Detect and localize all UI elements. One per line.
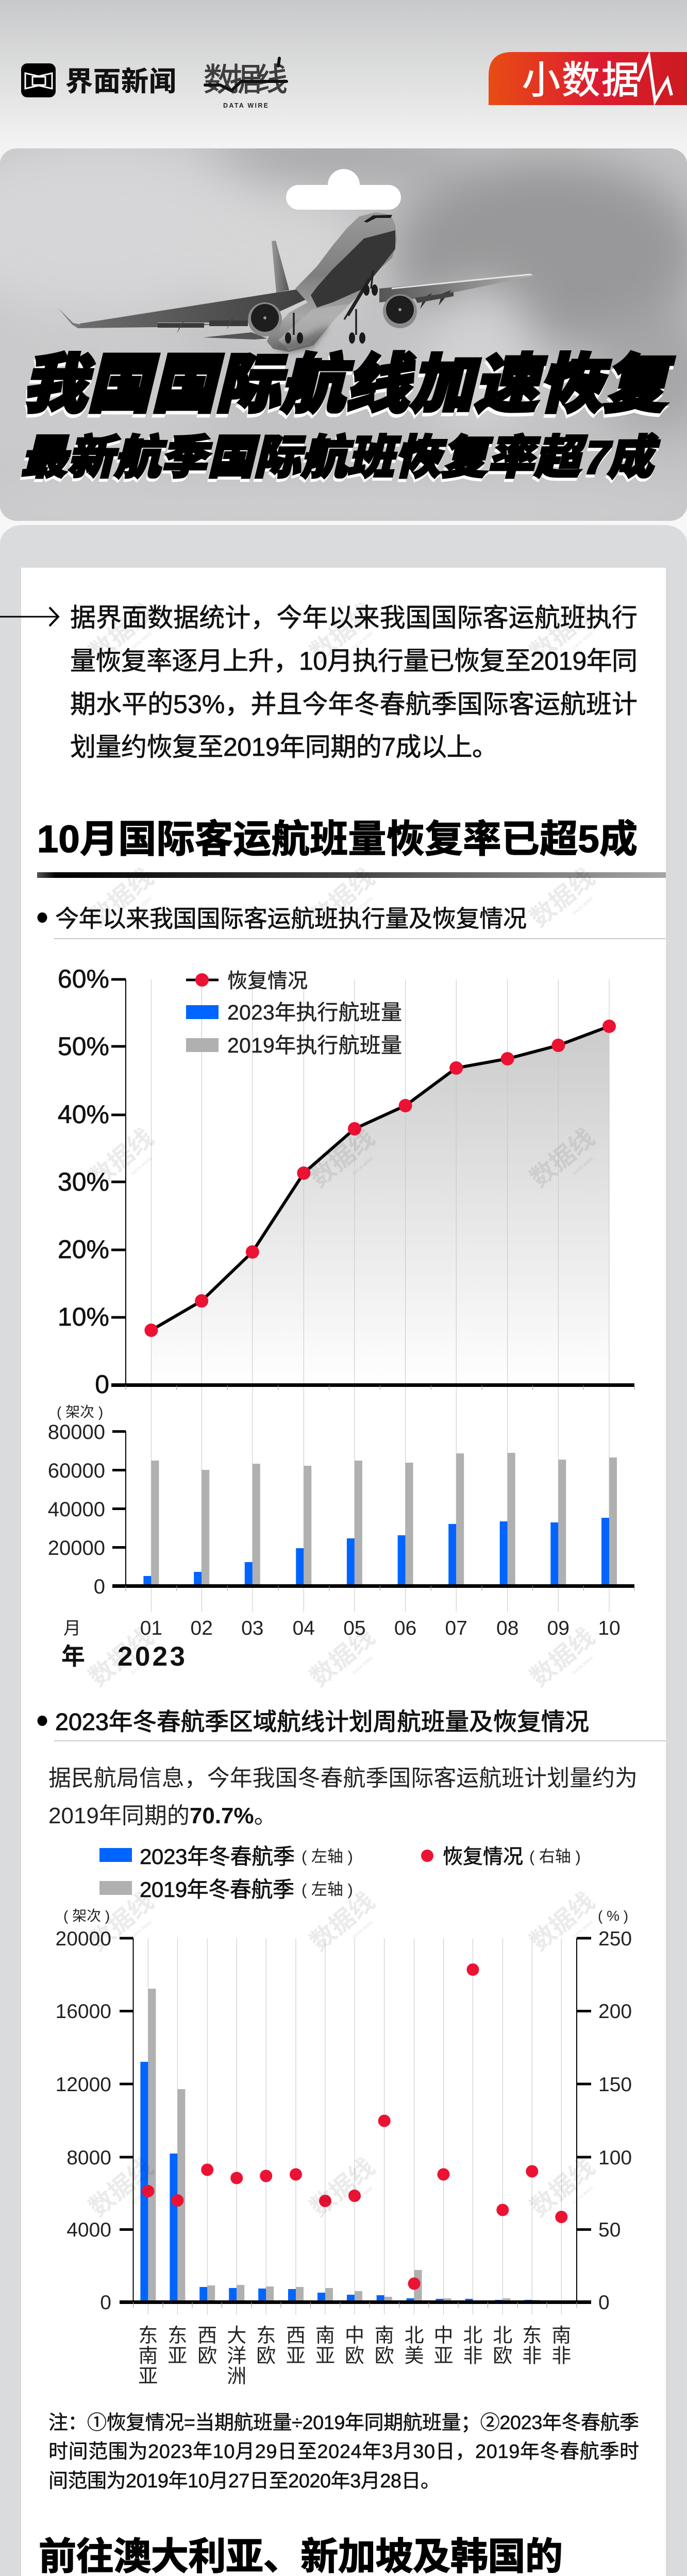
y axis: recovery: 0 — [95, 1370, 109, 1399]
y axis: flights: 80000 — [48, 1421, 105, 1444]
note: regional: 间范围为2019年10月27日至2020年3月28日。 — [48, 2470, 440, 2492]
x labels: regions: 中 — [433, 2325, 454, 2347]
badge: small data: 小数据 — [522, 59, 640, 101]
x labels: regions: 欧 — [345, 2346, 364, 2367]
aircraft — [58, 212, 537, 352]
watermarks: DATA WIRE — [572, 1156, 594, 1176]
left axis: ( 架次 ) — [63, 1908, 110, 1924]
watermarks: DATA WIRE — [351, 1655, 374, 1675]
x labels: regions: 北 — [405, 2325, 424, 2347]
watermarks: 数据线 — [526, 2154, 600, 2222]
landing gear — [285, 270, 378, 344]
legend: monthly: 2023年执行航班量 — [227, 1001, 402, 1024]
y axis: recovery: 40% — [58, 1100, 109, 1129]
x axis year: 2023 — [118, 1641, 185, 1672]
x labels: regions: 亚 — [315, 2346, 335, 2367]
x axis months: 10 — [598, 1617, 621, 1639]
line series — [144, 1020, 616, 1337]
right axis: 100 — [598, 2147, 632, 2169]
left axis: 12000 — [56, 2074, 111, 2096]
x labels: regions: 洋 — [227, 2346, 246, 2367]
x axis months: 02 — [191, 1617, 213, 1639]
x labels: regions: 东 — [256, 2325, 276, 2347]
watermarks: DATA WIRE — [351, 1919, 374, 1940]
y axis: recovery: 10% — [58, 1302, 109, 1331]
x labels: regions: 亚 — [286, 2346, 306, 2367]
watermarks: DATA WIRE — [351, 2185, 374, 2206]
chart: monthly recovery line and bars — [48, 964, 634, 1672]
x axis months: 01 — [140, 1617, 162, 1639]
x labels: regions: 西 — [286, 2325, 306, 2347]
legend: regional: ( 左轴 ) — [301, 1848, 353, 1866]
x axis months: 05 — [343, 1617, 366, 1639]
left axis: 8000 — [66, 2147, 111, 2169]
right axis: 0 — [598, 2292, 610, 2314]
x axis year: 年 — [61, 1643, 85, 1670]
x axis months: 月 — [63, 1619, 81, 1638]
watermarks: 数据线 — [526, 864, 600, 933]
x labels: regions: 非 — [551, 2346, 571, 2367]
y axis: recovery: 60% — [58, 964, 109, 993]
x axis months: 07 — [445, 1617, 467, 1639]
y axis: flights: 60000 — [48, 1460, 105, 1482]
badge: small data — [489, 52, 687, 105]
page background top — [0, 0, 687, 541]
note: regional: 注：①恢复情况=当期航班量÷2019年同期航班量；②2023年冬春航季 — [48, 2412, 639, 2434]
x labels: regions: 亚 — [167, 2346, 187, 2367]
hero title: 我国国际航线加速恢复 — [19, 352, 680, 424]
watermarks: DATA WIRE — [572, 630, 594, 651]
x labels: regions: 欧 — [493, 2346, 512, 2367]
intro text: 划量约恢复至2019年同期的7成以上。 — [70, 733, 498, 761]
left axis: 16000 — [56, 2001, 111, 2023]
paragraph: regional: 2019年同期的70.7%。 — [48, 1803, 277, 1828]
x axis months: 06 — [394, 1617, 416, 1639]
watermarks: DATA WIRE — [130, 2185, 153, 2206]
watermarks: 数据线 — [306, 1888, 380, 1956]
watermarks: 数据线 — [85, 1623, 159, 1692]
watermarks: DATA WIRE — [130, 1156, 153, 1176]
note: regional — [48, 2412, 639, 2492]
white content panel — [21, 568, 666, 2576]
legend: regional: 2023年冬春航季 — [140, 1844, 295, 1869]
intro text: 据界面数据统计，今年以来我国国际客运航班执行 — [70, 603, 638, 632]
watermarks: DATA WIRE — [351, 630, 374, 651]
watermarks: 数据线 — [306, 1623, 380, 1692]
x labels: regions: 非 — [463, 2346, 483, 2367]
hero title: 最新航季国际航班恢复率超7成 — [18, 432, 663, 484]
legend: monthly: 恢复情况 — [227, 970, 308, 992]
paragraph: regional — [48, 1766, 638, 1828]
watermarks: DATA WIRE — [572, 2185, 594, 2206]
y axis: recovery: 50% — [58, 1032, 109, 1061]
legend: regional: ( 左轴 ) — [301, 1880, 353, 1899]
rule — [37, 872, 666, 878]
hero image panel — [0, 134, 687, 538]
x labels: regions: 亚 — [138, 2366, 158, 2387]
watermarks: 数据线 — [306, 864, 380, 933]
watermarks: DATA WIRE — [572, 895, 594, 916]
subheading: regional plan: 2023年冬春航季区域航线计划周航班量及恢复情况 — [55, 1708, 589, 1735]
x labels: regions: 非 — [522, 2346, 542, 2367]
hero title — [17, 349, 681, 487]
watermarks: DATA WIRE — [351, 1156, 374, 1176]
intro text: 期水平的53%，并且今年冬春航季国际客运航班计 — [70, 690, 638, 719]
watermarks: DATA WIRE — [130, 1919, 153, 1940]
x axis months: 08 — [496, 1617, 518, 1639]
gray page body — [0, 525, 687, 2576]
x labels: regions: 东 — [167, 2325, 187, 2347]
logo: jiemian news — [21, 63, 176, 97]
right axis — [577, 1908, 632, 2314]
watermarks: 数据线 — [526, 1888, 600, 1956]
watermarks: 数据线 — [85, 2154, 159, 2222]
watermarks: 数据线 — [526, 599, 600, 667]
x labels: regions: 中 — [345, 2325, 364, 2347]
y axis: flights: 40000 — [48, 1498, 105, 1521]
icon: white knob — [286, 169, 401, 210]
engines — [248, 294, 417, 336]
x labels: regions: 东 — [138, 2325, 158, 2347]
x labels: regions: 洲 — [227, 2366, 246, 2387]
legend: monthly — [186, 970, 402, 1057]
x labels: regions: 南 — [138, 2346, 158, 2367]
x axis months: 04 — [293, 1617, 315, 1639]
x labels: regions — [138, 2325, 571, 2387]
x labels: regions: 北 — [493, 2325, 512, 2347]
dots: regional recovery — [142, 1963, 567, 2290]
bars: 2019 season — [148, 1989, 540, 2302]
watermarks: DATA WIRE — [130, 1655, 153, 1675]
right axis: 150 — [598, 2074, 632, 2096]
y axis: recovery: 30% — [58, 1167, 109, 1196]
watermarks: 数据线 — [85, 864, 159, 933]
logo: data wire — [204, 58, 288, 109]
hero title: 我国国际航线加速恢复 — [20, 349, 681, 420]
subheading: monthly flights — [37, 905, 666, 939]
x labels: regions: 北 — [463, 2325, 483, 2347]
watermarks: DATA WIRE — [351, 895, 374, 916]
x labels: regions: 南 — [315, 2325, 335, 2347]
legend: regional — [99, 1844, 581, 1902]
x labels: regions: 南 — [375, 2325, 394, 2347]
y axis: flights — [48, 1404, 126, 1598]
bars: 2019 flights — [151, 1453, 617, 1586]
x labels: regions: 欧 — [375, 2346, 394, 2367]
left axis — [56, 1908, 133, 2314]
x labels: regions: 西 — [197, 2325, 217, 2347]
y axis: recovery — [58, 964, 126, 1399]
x axis months: 03 — [241, 1617, 263, 1639]
x axis year — [61, 1641, 185, 1672]
left axis: 4000 — [66, 2219, 111, 2241]
bars: 2023 season — [140, 2062, 532, 2302]
legend: monthly: 2019年执行航班量 — [227, 1033, 402, 1057]
y axis: flights: ( 架次 ) — [57, 1404, 103, 1420]
watermarks: DATA WIRE — [130, 630, 153, 651]
watermarks: 数据线 — [85, 1124, 159, 1193]
intro text — [70, 603, 638, 761]
note: regional: 时间范围为2023年10月29日至2024年3月30日，2019年冬春航季时 — [48, 2441, 639, 2463]
y axis: flights: 0 — [94, 1575, 105, 1598]
legend: regional: 恢复情况 — [443, 1846, 523, 1868]
x labels: regions: 美 — [405, 2346, 424, 2367]
y axis: flights: 20000 — [48, 1537, 105, 1560]
right axis: 200 — [598, 2001, 632, 2023]
right axis: 250 — [598, 1928, 632, 1950]
watermarks: 数据线 — [306, 1124, 380, 1193]
watermarks: DATA WIRE — [130, 895, 153, 916]
watermarks: DATA WIRE — [572, 1655, 594, 1675]
watermarks: 数据线 — [526, 1124, 600, 1193]
chart: regional flights and recovery — [56, 1908, 632, 2387]
watermarks: 数据线 — [85, 1888, 159, 1956]
legend: regional: ( 右轴 ) — [529, 1848, 581, 1866]
x labels: regions: 大 — [227, 2325, 246, 2347]
x labels: regions: 亚 — [433, 2346, 454, 2367]
legend: regional: 2019年冬春航季 — [140, 1877, 294, 1902]
watermarks: 数据线 — [306, 2154, 380, 2222]
logo: data wire: DATA WIRE — [223, 102, 268, 109]
y axis: recovery: 20% — [58, 1235, 109, 1264]
paragraph: regional: 据民航局信息，今年我国冬春航季国际客运航班计划量约为 — [48, 1766, 638, 1791]
subheading: monthly flights: 今年以来我国国际客运航班执行量及恢复情况 — [55, 905, 527, 932]
x axis months: 09 — [547, 1617, 569, 1639]
right axis: 50 — [598, 2219, 621, 2241]
watermarks: 数据线 — [306, 599, 380, 667]
x labels: regions: 欧 — [197, 2346, 217, 2367]
left axis: 0 — [100, 2292, 111, 2314]
watermarks — [85, 599, 605, 2576]
watermarks: 数据线 — [526, 1623, 600, 1692]
x labels: regions: 南 — [551, 2325, 571, 2347]
bars: 2023 flights — [143, 1518, 609, 1586]
watermarks: 数据线 — [85, 599, 159, 667]
hero title: 最新航季国际航班恢复率超7成 — [17, 435, 662, 487]
intro text: 量恢复率逐月上升，10月执行量已恢复至2019年同 — [70, 647, 638, 675]
arrow: intro — [0, 607, 58, 626]
x labels: regions: 欧 — [256, 2346, 276, 2367]
logo: jiemian news: 界面新闻 — [65, 66, 176, 97]
x labels: regions: 东 — [522, 2325, 542, 2347]
logo: data wire: 数据线 — [204, 62, 288, 98]
watermarks: DATA WIRE — [572, 1919, 594, 1940]
right axis: ( % ) — [598, 1908, 628, 1924]
x axis months — [63, 1617, 621, 1639]
heading: section 1: 10月国际客运航班量恢复率已超5成 — [37, 818, 638, 860]
left axis: 20000 — [56, 1928, 111, 1950]
